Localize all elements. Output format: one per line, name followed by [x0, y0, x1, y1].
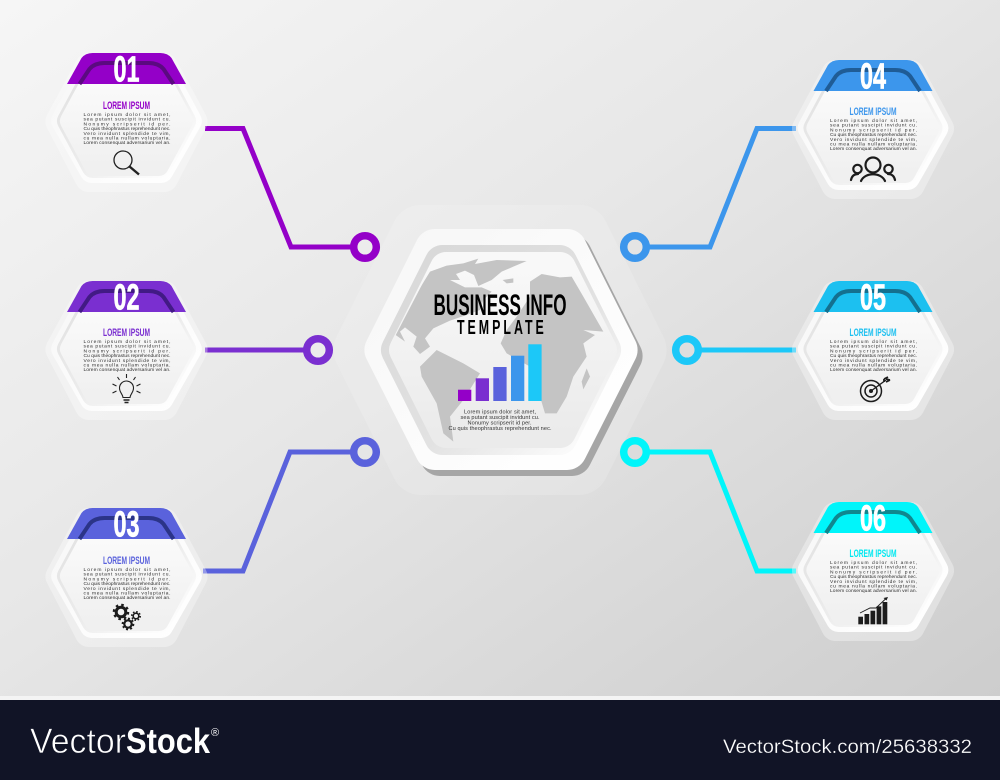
body text 02: Lorem ipsum dolor sit amet, — [84, 339, 170, 345]
tab arch 04 — [826, 70, 920, 91]
tab 03 — [67, 508, 186, 539]
connector 05 — [676, 339, 796, 361]
connector 01 — [205, 128, 376, 258]
panel: central hexagon — [364, 235, 636, 465]
body text 01: cu mea nulla nullam voluptaria. — [84, 136, 170, 142]
connector 03 — [203, 441, 376, 571]
body text 06: Vero invidunt splendide te vim, — [830, 579, 917, 585]
panel: card 06 — [806, 498, 940, 627]
subtitle: TEMPLATE — [457, 316, 544, 339]
panel: card 03 — [60, 504, 194, 633]
body text 04: Lorem ipsum dolor sit amet, — [830, 118, 917, 124]
tab 01 — [67, 53, 186, 84]
footer logo — [30, 722, 219, 761]
body text 01: Lorem consenquat adversarium vel an. — [84, 140, 170, 146]
body text 03: cu mea nulla nullam voluptaria. — [84, 590, 170, 596]
icon: target — [860, 377, 890, 402]
heading 03: LOREM IPSUM — [103, 555, 150, 567]
footer bar — [0, 700, 1000, 780]
body text 03: Vero invidunt splendide te vim, — [84, 586, 170, 592]
tab 04 — [814, 60, 932, 91]
tab 02 — [67, 281, 186, 312]
title: BUSINESS INFO — [434, 289, 566, 322]
heading 06: LOREM IPSUM — [850, 548, 897, 560]
panel: card 04 — [806, 56, 940, 185]
number 05: 05 — [860, 277, 886, 318]
body text 02: Nonumy scripserit id per. — [84, 348, 170, 354]
icon: growth chart — [858, 597, 888, 624]
tab 06 — [814, 502, 932, 533]
hexagon drop shadow — [389, 255, 623, 456]
body text 04: cu mea nulla nullam voluptaria. — [830, 142, 917, 148]
body text 05: Lorem consenquat adversarium vel an. — [830, 367, 917, 373]
caption: Lorem ipsum dolor sit amet, — [464, 410, 536, 416]
body text 06: Lorem consenquat adversarium vel an. — [830, 588, 917, 594]
white hexagon band — [384, 249, 618, 450]
body text 06: Lorem ipsum dolor sit amet, — [830, 560, 917, 566]
faint outer hexagon — [364, 235, 636, 465]
body text 05: Nonumy scripserit id per. — [830, 348, 917, 354]
body text 03: sea putant suscipit invidunt cu. — [84, 572, 170, 578]
icon: gears — [114, 605, 140, 629]
body text 06: sea putant suscipit invidunt cu. — [830, 565, 917, 571]
tab arch 05 — [826, 291, 920, 312]
body text 03 — [84, 567, 170, 601]
body text 04: Nonumy scripserit id per. — [830, 127, 917, 133]
body text 04: Vero invidunt splendide te vim, — [830, 137, 917, 143]
tab arch 02 — [80, 291, 174, 312]
body text 02: Lorem consenquat adversarium vel an. — [84, 367, 170, 373]
body text 01: Lorem ipsum dolor sit amet, — [84, 112, 170, 118]
body text 04 — [830, 118, 917, 152]
heading 04: LOREM IPSUM — [850, 106, 897, 118]
body text 03: Cu quis theophrastus reprehendunt nec. — [84, 581, 170, 587]
body text 06: cu mea nulla nullam voluptaria. — [830, 584, 917, 590]
tab arch 01 — [80, 63, 174, 84]
body text 05: Lorem ipsum dolor sit amet, — [830, 339, 917, 345]
tab 05 — [814, 281, 932, 312]
number 01: 01 — [114, 49, 140, 90]
body text 02: cu mea nulla nullam voluptaria. — [84, 362, 170, 368]
tab arch 06 — [826, 512, 920, 533]
inner hexagon face — [405, 268, 601, 432]
body text 01: Nonumy scripserit id per. — [84, 121, 170, 127]
body text 05: Vero invidunt splendide te vim, — [830, 358, 917, 364]
body text 01 — [84, 112, 170, 146]
body text 05: sea putant suscipit invidunt cu. — [830, 344, 917, 350]
body text 04: Lorem consenquat adversarium vel an. — [830, 146, 917, 152]
connector 06 — [624, 441, 796, 571]
body text 06: Nonumy scripserit id per. — [830, 569, 917, 575]
body text 06: Cu quis theophrastus reprehendunt nec. — [830, 574, 917, 580]
caption: Nonumy scripserit id per. — [468, 420, 532, 426]
body text 02: sea putant suscipit invidunt cu. — [84, 344, 170, 350]
body text 03: Lorem consenquat adversarium vel an. — [84, 595, 170, 601]
body text 02: Cu quis theophrastus reprehendunt nec. — [84, 353, 170, 359]
body text 06 — [830, 560, 917, 594]
panel: card 01 — [60, 49, 194, 178]
number 06: 06 — [860, 498, 886, 539]
caption: sea putant suscipit invidunt cu. — [460, 415, 540, 421]
number 02: 02 — [114, 277, 140, 318]
footer logo: Stock — [126, 722, 210, 761]
caption — [448, 410, 552, 432]
body text 05: cu mea nulla nullam voluptaria. — [830, 362, 917, 368]
icon: magnifier — [114, 151, 139, 174]
body text 03: Nonumy scripserit id per. — [84, 576, 170, 582]
divider strip — [0, 696, 1000, 700]
footer logo: ® — [211, 727, 219, 739]
bar chart — [458, 344, 542, 401]
world map — [393, 259, 603, 442]
tab arch 03 — [80, 518, 174, 539]
panel: card 05 — [806, 277, 940, 406]
heading 01: LOREM IPSUM — [103, 100, 150, 112]
inner hexagon ring — [399, 263, 603, 437]
body text 03: Lorem ipsum dolor sit amet, — [84, 567, 170, 573]
body text 04: sea putant suscipit invidunt cu. — [830, 123, 917, 129]
footer id: VectorStock.com/25638332 — [723, 737, 972, 758]
number 04: 04 — [860, 56, 886, 97]
body text 05 — [830, 339, 917, 373]
connector 04 — [624, 128, 796, 258]
heading 05: LOREM IPSUM — [850, 327, 897, 339]
connector 02 — [205, 339, 329, 361]
heading 02: LOREM IPSUM — [103, 327, 150, 339]
body text 01: Cu quis theophrastus reprehendunt nec. — [84, 126, 170, 132]
number 03: 03 — [114, 504, 140, 545]
body text 02: Vero invidunt splendide te vim, — [84, 358, 170, 364]
body text 01: Vero invidunt splendide te vim, — [84, 131, 170, 137]
body text 04: Cu quis theophrastus reprehendunt nec. — [830, 132, 917, 138]
icon: light bulb — [112, 374, 140, 402]
caption: Cu quis theophrastus reprehendunt nec. — [448, 426, 552, 432]
icon: people — [851, 158, 895, 181]
panel: card 02 — [60, 277, 194, 406]
body text 01: sea putant suscipit invidunt cu. — [84, 117, 170, 123]
body text 02 — [84, 339, 170, 373]
footer logo: Vector — [30, 722, 126, 761]
body text 05: Cu quis theophrastus reprehendunt nec. — [830, 353, 917, 359]
